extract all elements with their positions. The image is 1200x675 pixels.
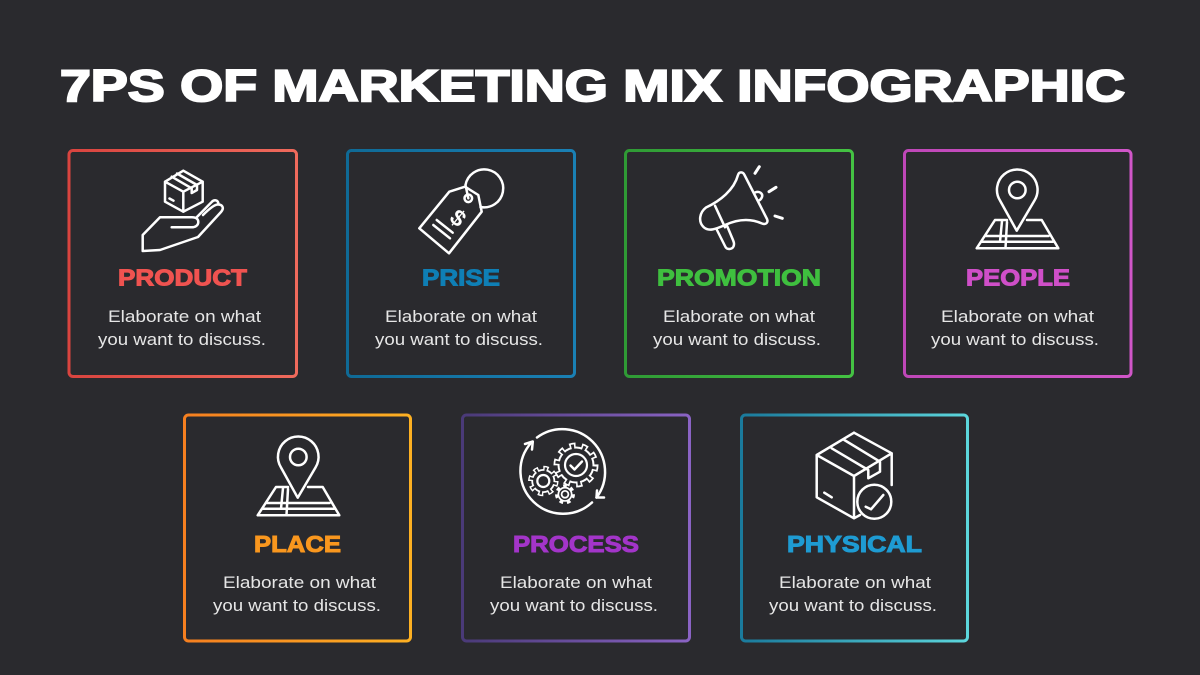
icon: price tag — [419, 169, 503, 253]
description: you want to discuss. — [769, 597, 937, 615]
description — [769, 574, 937, 615]
icon: map pin — [258, 436, 339, 515]
description: you want to discuss. — [375, 331, 543, 349]
description — [653, 308, 821, 349]
description: Elaborate on what — [779, 574, 931, 592]
description — [98, 308, 266, 349]
description — [490, 574, 658, 615]
panel: people — [904, 150, 1131, 376]
panel: promotion — [626, 150, 852, 376]
description: you want to discuss. — [490, 597, 658, 615]
description: you want to discuss. — [98, 331, 266, 349]
panel: place — [184, 415, 410, 641]
label: process: PROCESS — [513, 531, 639, 557]
panel: physical — [742, 415, 968, 641]
panel: prise — [348, 150, 574, 376]
description: Elaborate on what — [108, 308, 261, 326]
description: you want to discuss. — [213, 597, 381, 615]
panel: process — [462, 415, 690, 641]
label: physical: PHYSICAL — [787, 531, 922, 557]
label: promotion: PROMOTION — [657, 264, 821, 290]
description: Elaborate on what — [500, 574, 652, 592]
description: Elaborate on what — [663, 308, 815, 326]
label: product: PRODUCT — [118, 264, 247, 290]
icon: megaphone — [700, 167, 782, 249]
cycle arrows — [520, 429, 605, 514]
description — [375, 308, 543, 349]
description: Elaborate on what — [385, 308, 537, 326]
label: people: PEOPLE — [966, 264, 1070, 290]
icon: hand holding box — [143, 171, 223, 251]
medium gear — [531, 468, 556, 494]
icon: box with check — [817, 433, 892, 519]
label: place: PLACE — [254, 531, 341, 557]
icon: price tag: $ — [445, 204, 472, 232]
description: Elaborate on what — [223, 574, 376, 592]
description: Elaborate on what — [941, 308, 1094, 326]
large gear — [557, 446, 595, 484]
panel: product — [69, 150, 296, 376]
description — [213, 574, 381, 615]
description: you want to discuss. — [653, 331, 821, 349]
small gear — [557, 486, 573, 502]
icon: map pin — [977, 169, 1058, 248]
description: you want to discuss. — [931, 331, 1099, 349]
icon: gears in cycle — [520, 429, 605, 514]
description — [931, 308, 1099, 349]
title: 7PS OF MARKETING MIX INFOGRAPHIC — [60, 62, 1125, 111]
label: prise: PRISE — [422, 264, 500, 290]
